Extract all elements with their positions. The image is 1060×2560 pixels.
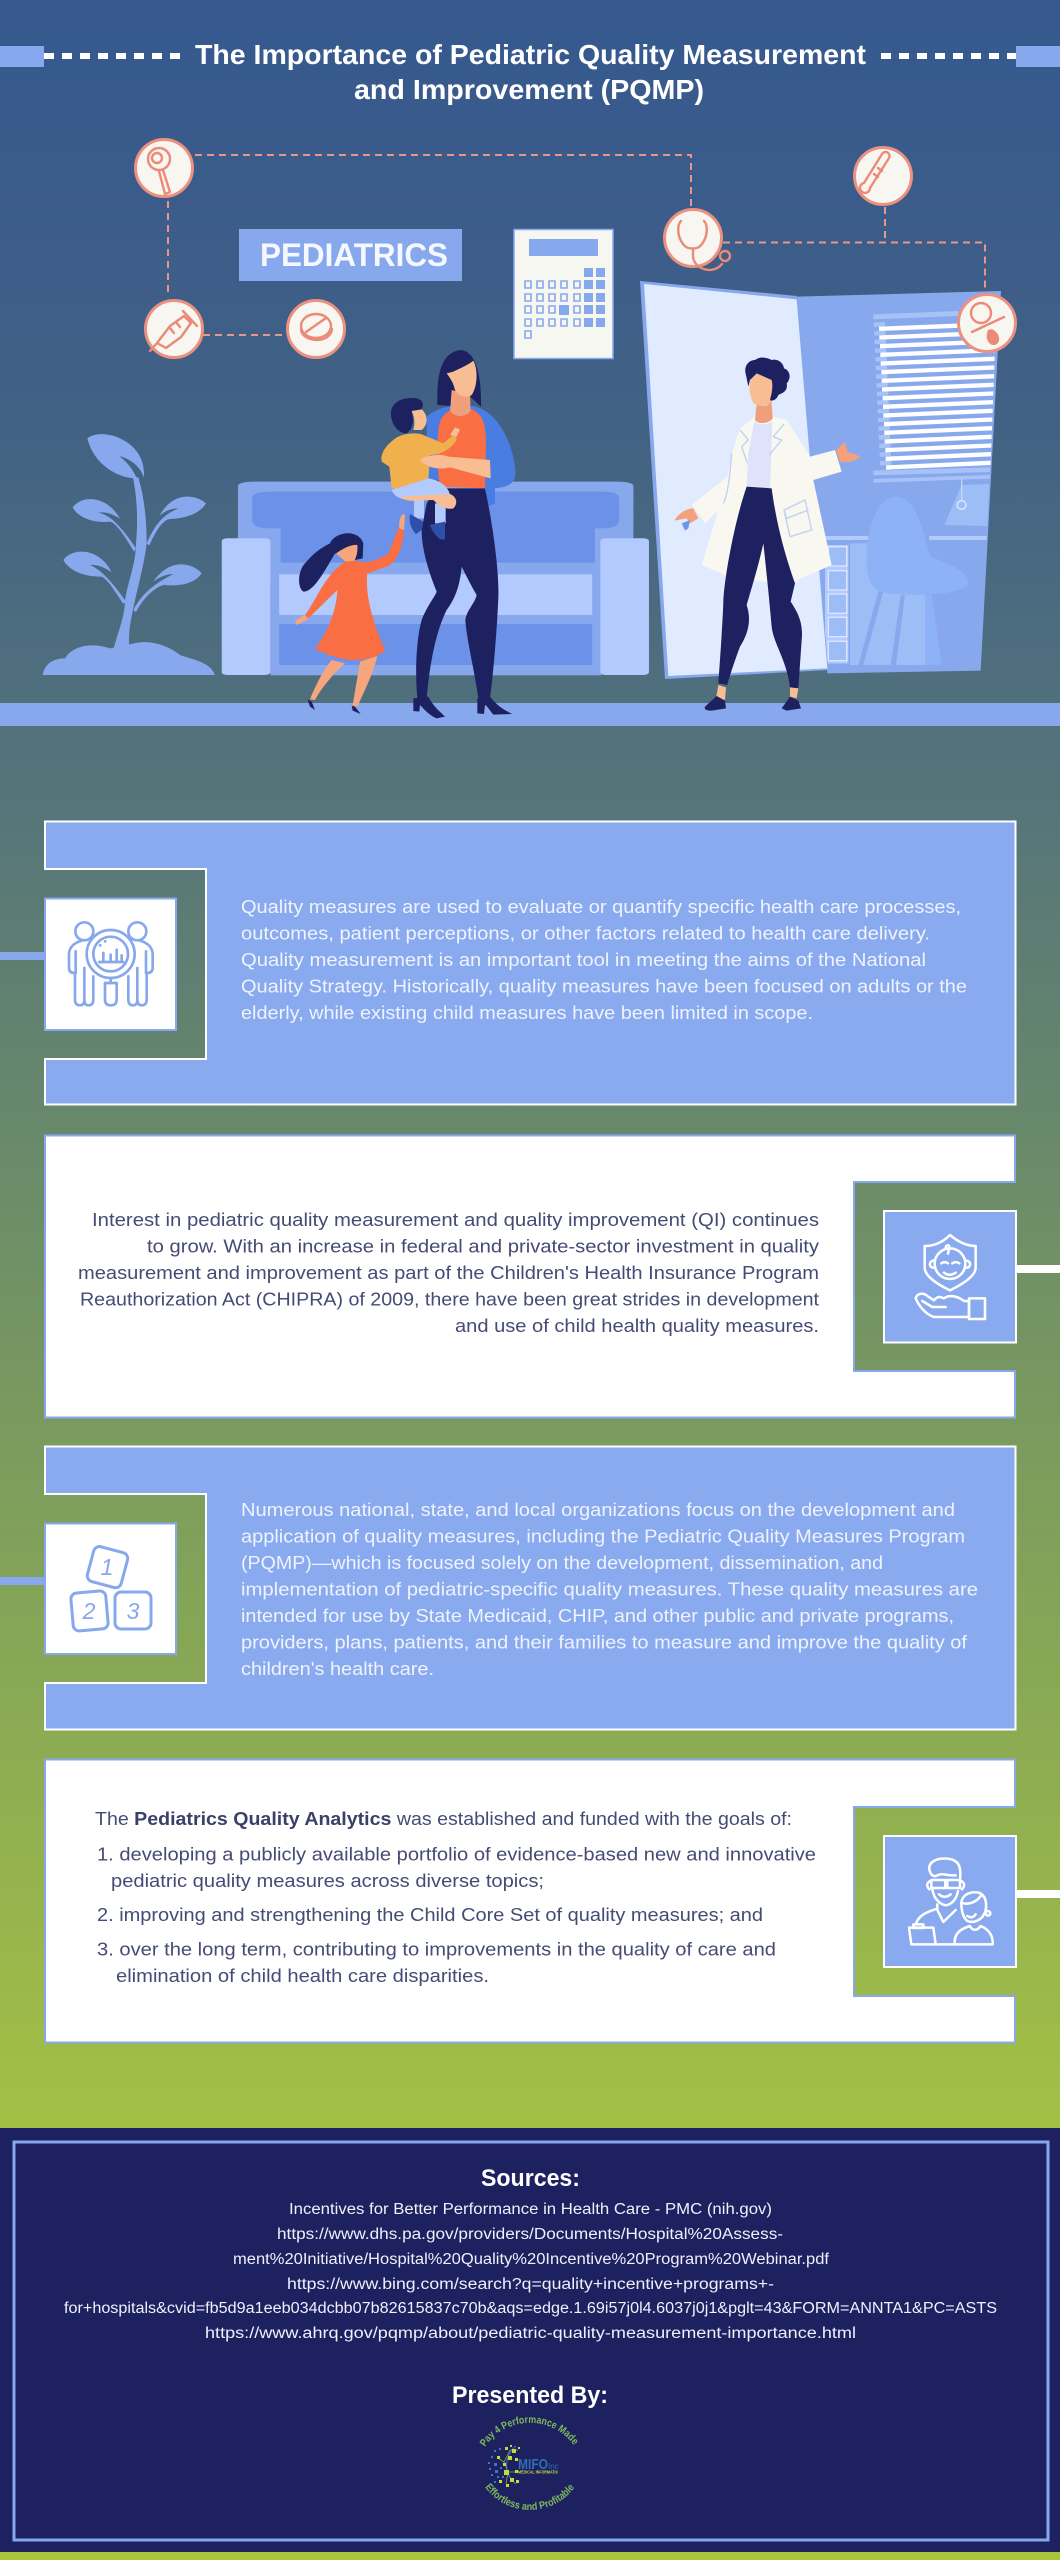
illustration: exam room door bbox=[640, 281, 1001, 679]
icon: pacifier bbox=[958, 294, 1016, 352]
panel text: The Pediatrics Quality Analytics was established and funded with the goals of: bbox=[95, 1808, 792, 1829]
connector left bbox=[0, 1577, 45, 1585]
icon: stethoscope bbox=[664, 210, 730, 270]
panel text: elimination of child health care disparities. bbox=[116, 1965, 489, 1986]
panel text: Quality measures are used to evaluate or quantify specific health care processes, bbox=[241, 896, 961, 917]
connector right bbox=[1016, 1890, 1060, 1898]
panel text: implementation of pediatric-specific quality measures. These quality measures are bbox=[241, 1578, 978, 1600]
icon box: people with magnifier bbox=[45, 898, 176, 1030]
panel text: measurement and improvement as part of the Children's Health Insurance Program bbox=[78, 1262, 819, 1283]
panel text: 1. developing a publicly available portfolio of evidence-based new and innovative bbox=[97, 1844, 816, 1864]
illustration: sofa bbox=[222, 482, 649, 675]
title banner bbox=[0, 39, 1060, 105]
panel text: Quality Strategy. Historically, quality measures have been focused on adults or the bbox=[241, 976, 967, 996]
heading: sources: Sources: bbox=[481, 2165, 580, 2192]
panel text: Numerous national, state, and local organizations focus on the development and bbox=[241, 1499, 955, 1520]
panel text: 3. over the long term, contributing to improvements in the quality of care and bbox=[97, 1938, 776, 1960]
illustration: floor bbox=[0, 703, 1060, 726]
source list: https://www.ahrq.gov/pqmp/about/pediatric-quality-measurement-importance.html bbox=[205, 2325, 856, 2342]
panel text bbox=[78, 1209, 820, 1336]
wall calendar bbox=[514, 230, 613, 358]
source list: https://www.bing.com/search?q=quality+incentive+programs+- bbox=[287, 2276, 774, 2293]
panel text: intended for use by State Medicaid, CHIP, and other public and private programs, bbox=[241, 1605, 954, 1626]
panel text: and use of child health quality measures. bbox=[455, 1315, 819, 1336]
source list bbox=[64, 2201, 997, 2342]
illustration: mother holding toddler bbox=[381, 350, 515, 718]
panel text: providers, plans, patients, and their families to measure and improve the quality of bbox=[241, 1632, 968, 1652]
panel: pediatrics quality analytics bbox=[45, 1760, 1060, 2042]
illustration: plant bbox=[43, 434, 215, 675]
source list: Incentives for Better Performance in Health Care - PMC (nih.gov) bbox=[289, 2201, 772, 2218]
icon: thermometer bbox=[854, 148, 912, 204]
dashed connector lines bbox=[168, 155, 985, 335]
panel text: outcomes, patient perceptions, or other factors related to health care delivery. bbox=[241, 922, 930, 944]
source list: ment%20Initiative/Hospital%20Quality%20Incentive%20Program%20Webinar.pdf bbox=[233, 2251, 830, 2268]
logo: MIFO: Effortless and Profitable bbox=[485, 2483, 574, 2510]
title banner: The Importance of Pediatric Quality Measurement bbox=[195, 39, 866, 70]
panel text bbox=[241, 1499, 978, 1679]
panel text: application of quality measures, including the Pediatric Quality Measures Program bbox=[241, 1526, 965, 1546]
panel text: pediatric quality measures across diverse topics; bbox=[111, 1870, 544, 1891]
source list: https://www.dhs.pa.gov/providers/Documents/Hospital%20Assess- bbox=[277, 2226, 783, 2243]
icon: pill bbox=[288, 300, 344, 358]
illustration: girl bbox=[295, 514, 405, 714]
panel: footer sources bbox=[0, 2128, 1060, 2552]
heading: presented by: Presented By: bbox=[452, 2382, 608, 2409]
panel text: Quality measurement is an important tool in meeting the aims of the National bbox=[241, 949, 926, 970]
source list: for+hospitals&cvid=fb5d9a1eeb034dcbb07b82615837c70b&aqs=edge.1.69i57j0l4.6037j0j1&pglt=43&FORM=ANNTA1&PC=ASTS bbox=[64, 2300, 997, 2317]
panel text bbox=[241, 896, 967, 1023]
panel text: to grow. With an increase in federal and private-sector investment in quality bbox=[147, 1236, 820, 1256]
panel text: 2. improving and strengthening the Child Core Set of quality measures; and bbox=[97, 1904, 763, 1925]
logo: MIFO: Pay 4 Performance Made bbox=[480, 2416, 578, 2446]
logo: MIFO bbox=[480, 2416, 578, 2510]
panel text: Interest in pediatric quality measurement and quality improvement (QI) continues bbox=[92, 1209, 819, 1230]
icon: magnifier bbox=[136, 140, 192, 196]
pediatrics sign bbox=[239, 229, 462, 281]
icon box: doctor and child bbox=[884, 1836, 1016, 1967]
panel text: (PQMP)—which is focused solely on the development, dissemination, and bbox=[241, 1552, 883, 1573]
connector left bbox=[0, 952, 45, 960]
logo: MIFO: Inc bbox=[548, 2462, 559, 2471]
icon: syringe bbox=[146, 300, 202, 358]
panel text: Reauthorization Act (CHIPRA) of 2009, there have been great strides in development bbox=[80, 1288, 819, 1310]
logo: MIFO: MIFO bbox=[518, 2456, 548, 2473]
panel: interest in pediatric QI bbox=[45, 1136, 1060, 1418]
panel: organizations and PQMP bbox=[0, 1446, 1016, 1730]
title banner: and Improvement (PQMP) bbox=[354, 74, 704, 105]
icon box: numbered blocks: 1 bbox=[101, 1554, 113, 1580]
panel: quality measures bbox=[0, 822, 1016, 1104]
icon box: numbered blocks: 2 bbox=[82, 1598, 96, 1624]
icon box: baby in shield over hand bbox=[884, 1211, 1016, 1342]
connector right bbox=[1016, 1265, 1060, 1273]
panel text bbox=[95, 1808, 816, 1986]
panel text: children's health care. bbox=[241, 1658, 434, 1679]
icon box: numbered blocks bbox=[45, 1524, 176, 1654]
panel text: elderly, while existing child measures have been limited in scope. bbox=[241, 1002, 813, 1023]
illustration: doctor bbox=[674, 357, 861, 711]
logo: MIFO: MEDICAL INFORMATIX bbox=[518, 2470, 558, 2474]
icon box: numbered blocks: 3 bbox=[127, 1598, 140, 1624]
pediatrics sign: PEDIATRICS bbox=[260, 237, 448, 273]
